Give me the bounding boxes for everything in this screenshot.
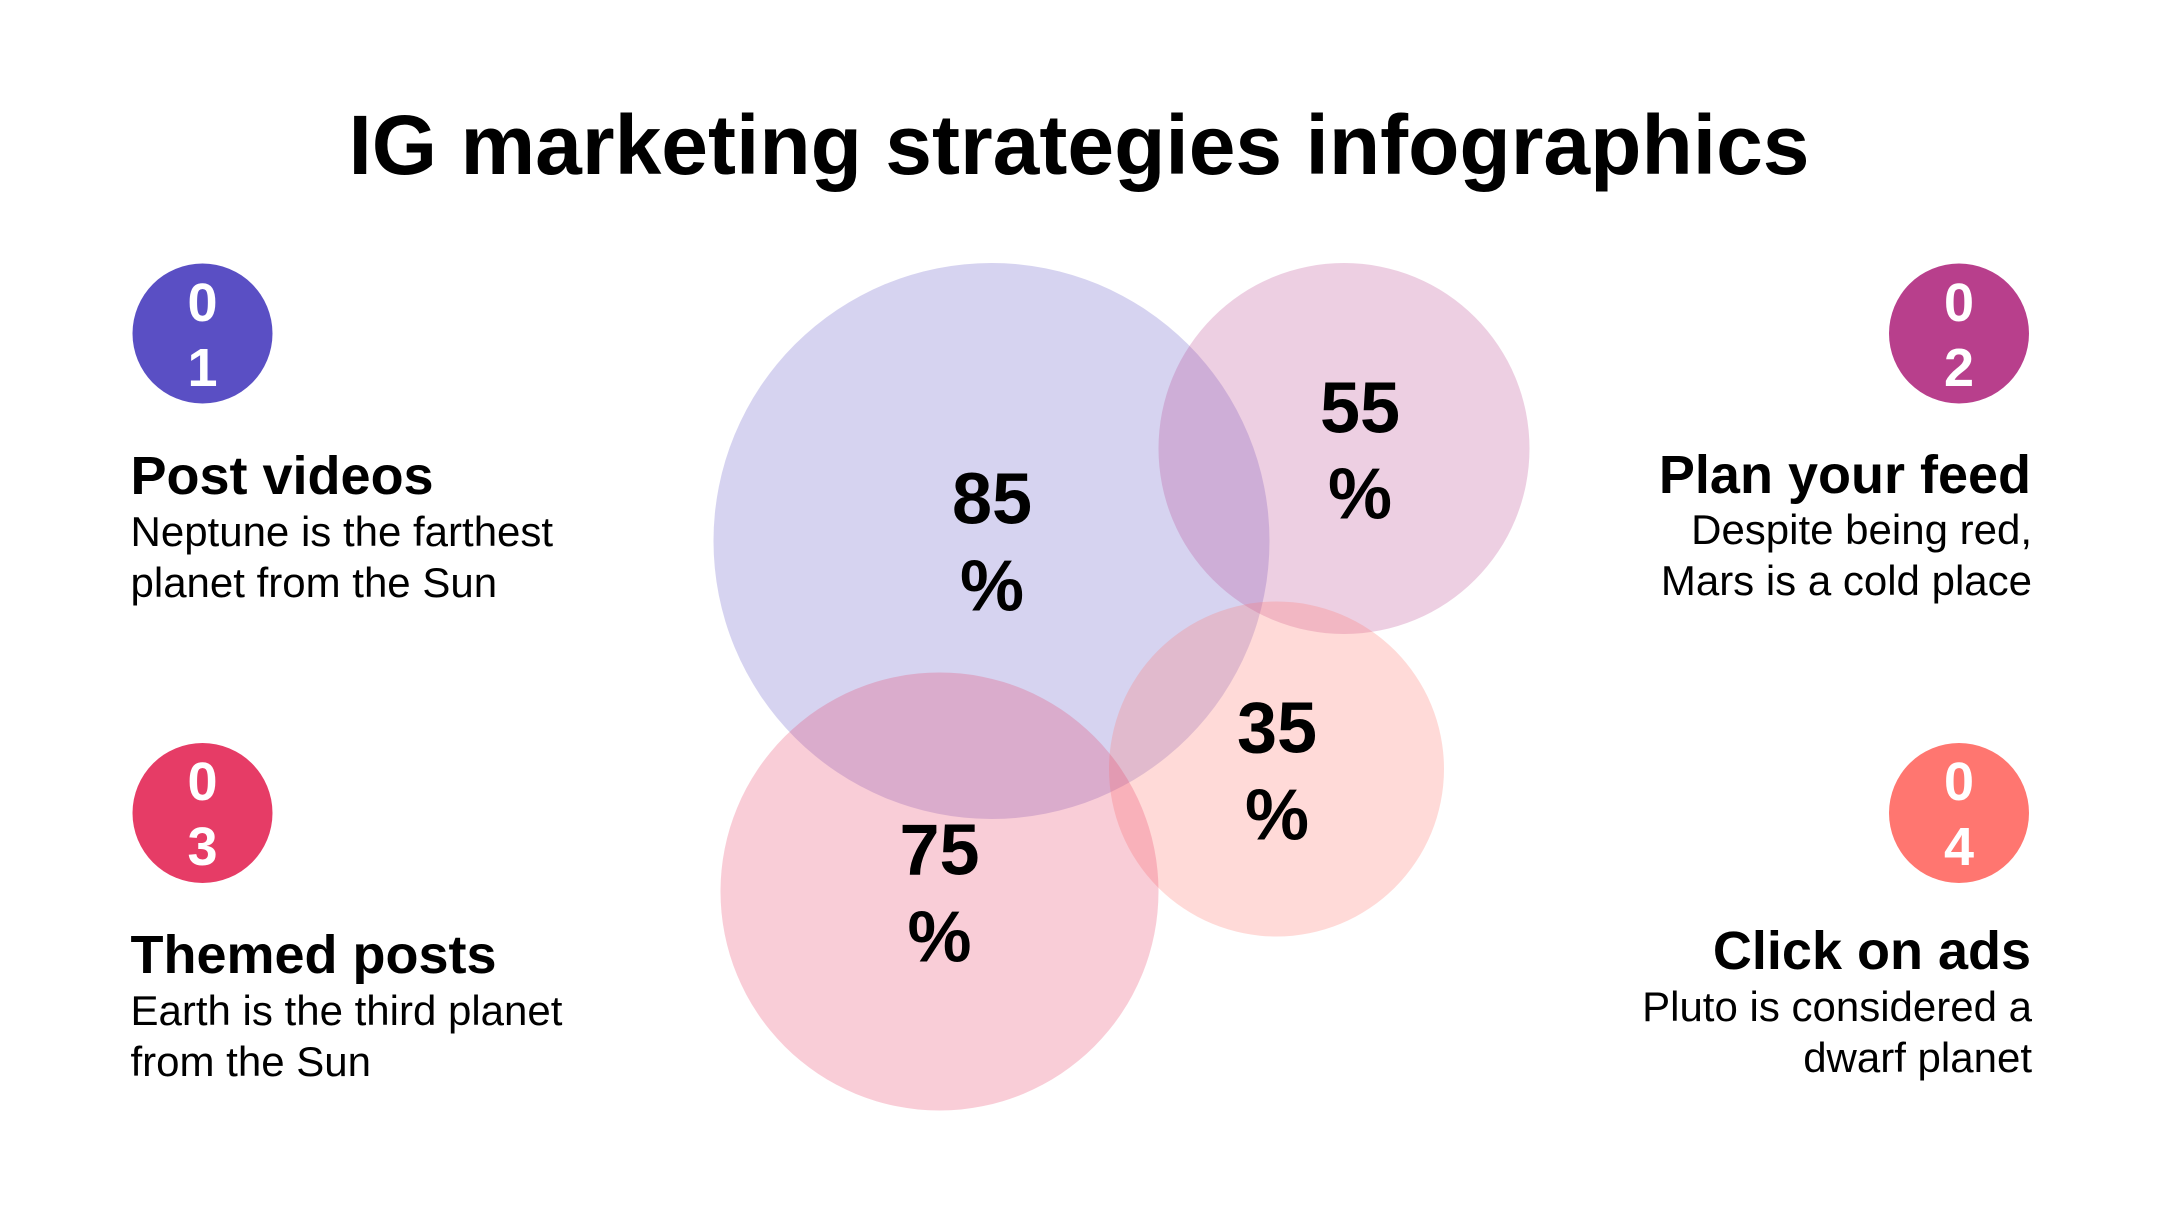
circle: 85% (714, 263, 1270, 819)
circle: 55% (1158, 263, 1530, 634)
description: Mars is a cold place (1661, 557, 2032, 604)
value: 55%: % (1328, 454, 1392, 534)
value: 35%: 35 (1237, 688, 1317, 768)
panel: plan your feed (1659, 264, 2032, 604)
badge 01: 0 (187, 273, 218, 333)
description: Despite being red, (1691, 506, 2032, 553)
badge 01 (132, 264, 272, 404)
badge 01: 1 (187, 338, 218, 398)
circle: 75% (720, 672, 1158, 1110)
badge 02 (1889, 264, 2029, 404)
description: Neptune is the farthest (130, 508, 553, 555)
value: 35%: % (1245, 776, 1309, 856)
value: 55%: 55 (1320, 368, 1400, 448)
heading: Post videos (130, 446, 434, 506)
value: 75%: % (907, 898, 972, 978)
description: planet from the Sun (130, 559, 497, 606)
value: 75%: 75 (899, 810, 980, 890)
heading: Click on ads (1713, 921, 2031, 981)
badge 03: 3 (187, 817, 218, 877)
panel: post videos (130, 264, 553, 606)
value: 85%: % (960, 546, 1024, 626)
panel: themed posts (130, 743, 563, 1085)
badge 03: 0 (187, 752, 218, 812)
heading: Themed posts (130, 925, 497, 985)
badge 02: 2 (1944, 338, 1974, 398)
badge 02: 0 (1944, 273, 1974, 333)
panel: click on ads (1642, 743, 2033, 1081)
description: from the Sun (130, 1038, 371, 1085)
description: dwarf planet (1803, 1034, 2032, 1081)
value: 85%: 85 (952, 460, 1032, 540)
badge 04: 4 (1944, 817, 1974, 877)
badge 04: 0 (1944, 752, 1974, 812)
description: Pluto is considered a (1642, 983, 2033, 1030)
badge 03 (132, 743, 272, 883)
circle: 35% (1109, 602, 1444, 936)
title: IG marketing strategies infographics (348, 98, 1810, 192)
badge 04 (1889, 743, 2029, 883)
venn diagram (714, 263, 1530, 1110)
heading: Plan your feed (1659, 445, 2031, 505)
description: Earth is the third planet (130, 987, 563, 1034)
